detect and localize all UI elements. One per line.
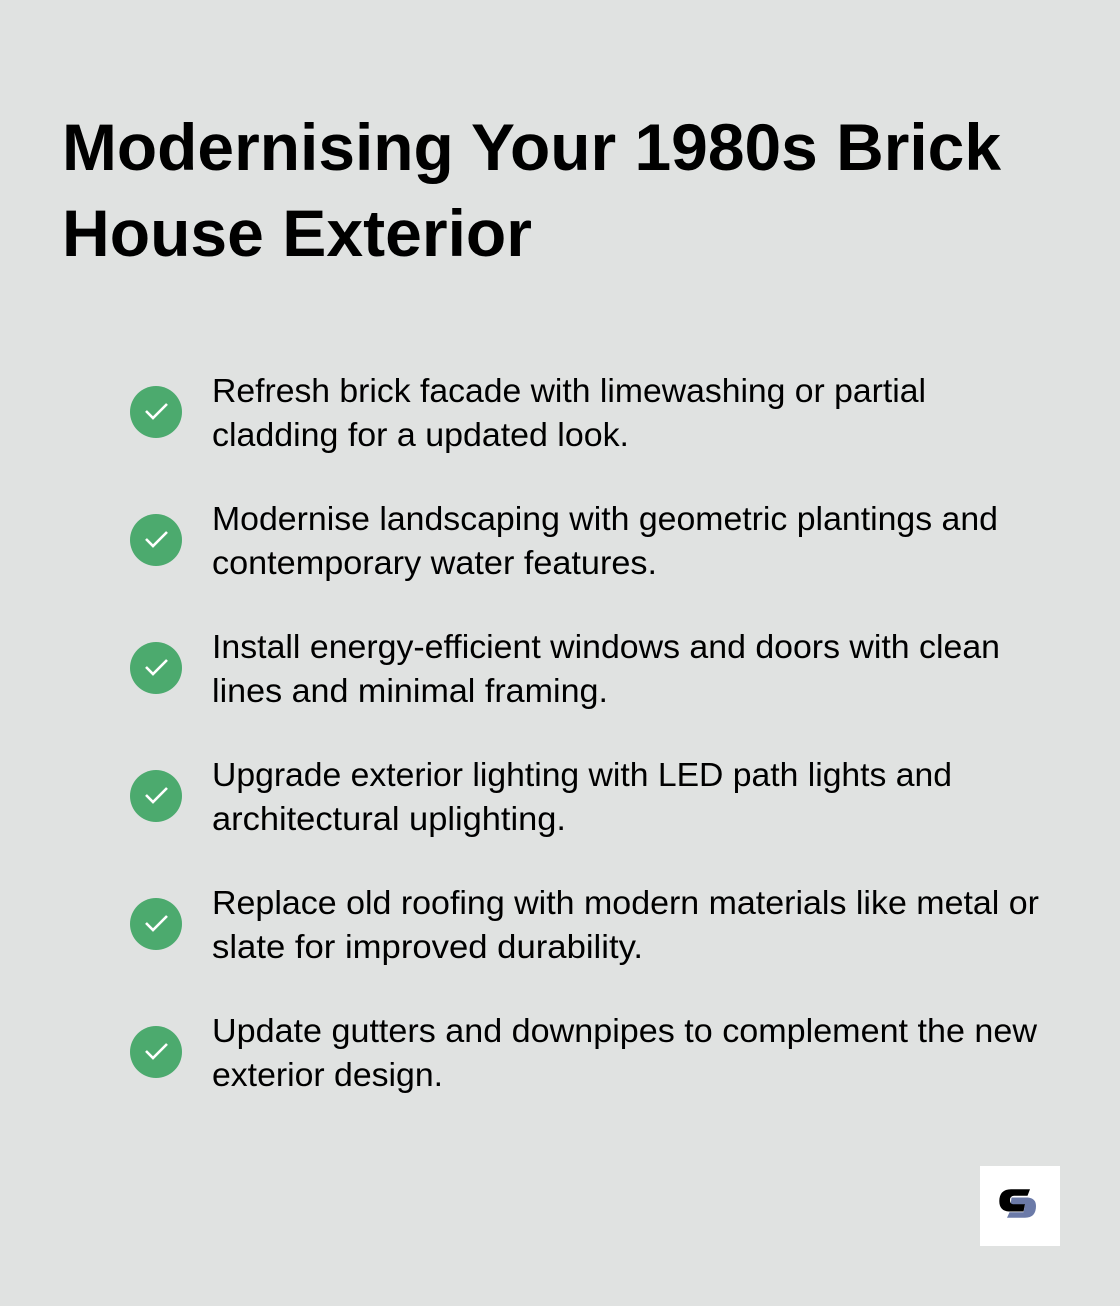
item text: Upgrade exterior lighting with LED path lights and [212, 756, 952, 793]
logo badge [980, 1166, 1060, 1246]
icon: check [130, 514, 182, 566]
icon: check [130, 386, 182, 438]
item text: Update gutters and downpipes to complement the new [212, 1012, 1037, 1049]
item text: Install energy-efficient windows and doors with clean [212, 628, 1000, 665]
item 4 [130, 756, 952, 837]
item text [212, 1012, 1037, 1093]
title: House Exterior [62, 196, 532, 270]
item text [212, 884, 1039, 965]
title: Modernising Your 1980s Brick [62, 110, 1001, 184]
checklist [130, 372, 1039, 1093]
item 2 [130, 500, 998, 581]
item text [212, 372, 926, 453]
icon: check [130, 770, 182, 822]
item text: contemporary water features. [212, 544, 657, 581]
title [62, 110, 1001, 270]
item text: cladding for a updated look. [212, 416, 629, 453]
item text: slate for improved durability. [212, 928, 643, 965]
item text: architectural uplighting. [212, 800, 566, 837]
item text: exterior design. [212, 1056, 443, 1093]
icon: check [130, 642, 182, 694]
item 6 [130, 1012, 1037, 1093]
item text [212, 500, 998, 581]
item text: Modernise landscaping with geometric plantings and [212, 500, 998, 537]
item text [212, 756, 952, 837]
item text: lines and minimal framing. [212, 672, 608, 709]
icon: check [130, 898, 182, 950]
item 1 [130, 372, 926, 453]
item text: Replace old roofing with modern materials like metal or [212, 884, 1039, 921]
item 3 [130, 628, 1000, 709]
item text [212, 628, 1000, 709]
item 5 [130, 884, 1039, 965]
item text: Refresh brick facade with limewashing or partial [212, 372, 926, 409]
icon: check [130, 1026, 182, 1078]
